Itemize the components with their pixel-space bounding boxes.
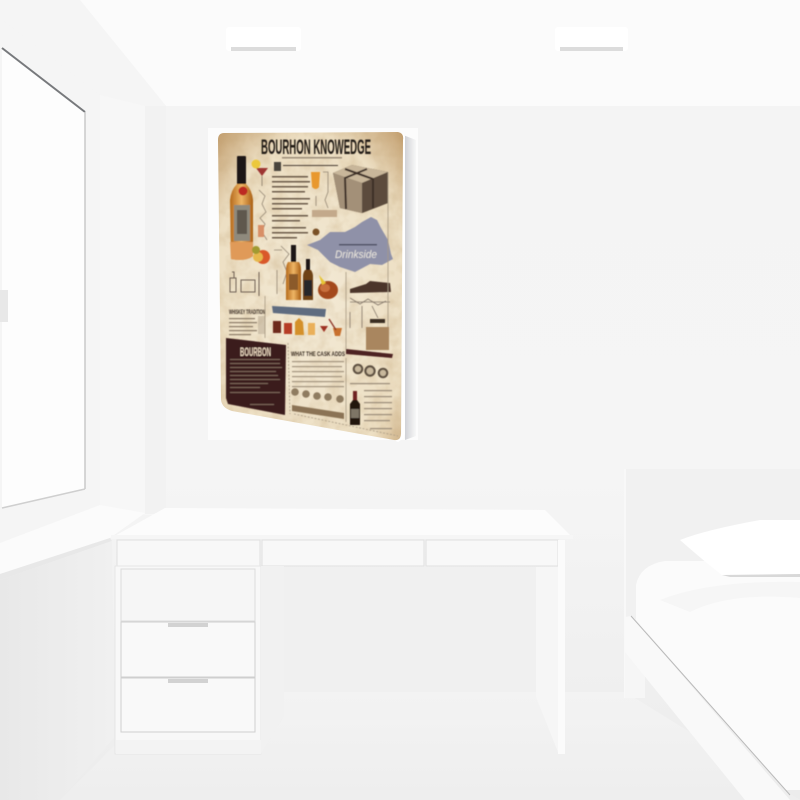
- tan swatch: [366, 327, 389, 350]
- mattress and bedding: [636, 561, 800, 790]
- map of region: [307, 217, 393, 272]
- desk right leg: [536, 540, 565, 754]
- headboard: [625, 469, 800, 629]
- drawer unit: [115, 566, 261, 754]
- brown dot: [312, 228, 320, 236]
- plinth: [116, 740, 261, 754]
- large whiskey bottle: [230, 156, 253, 260]
- amber tall drink: [311, 172, 320, 189]
- ceiling: [80, 0, 800, 106]
- lower left wall: [0, 541, 114, 800]
- second sketch drink column: [316, 172, 328, 208]
- subtitle line: [282, 157, 342, 158]
- ceiling light left: [226, 27, 301, 51]
- small spirits sketch left: [230, 272, 259, 296]
- drawer handles: [168, 625, 208, 681]
- castle-like crate illustration: [333, 165, 388, 213]
- qr code square: [274, 162, 281, 171]
- bed: [624, 469, 800, 800]
- right sketches: [350, 298, 390, 328]
- patterned strip: [292, 405, 344, 419]
- desk under back wall: [284, 567, 536, 692]
- drawer middle: [121, 622, 255, 677]
- pillow shadow: [722, 574, 800, 577]
- ceiling bulkhead: [0, 0, 166, 106]
- headboard edge: [624, 469, 626, 698]
- desk front edge: [111, 535, 573, 539]
- small heading right: [370, 319, 385, 323]
- pillow: [680, 520, 800, 575]
- red label band: [346, 349, 393, 358]
- small copper glass: [258, 225, 264, 237]
- window sill: [0, 505, 145, 574]
- poster paper: [215, 130, 407, 444]
- desk: [111, 508, 573, 754]
- underlined heading: [283, 165, 338, 166]
- drawer bottom: [121, 678, 255, 732]
- desk apron drawers: [117, 540, 558, 566]
- artwork group: [226, 136, 398, 436]
- bourbon dark panel: [226, 338, 286, 415]
- rail top line: [631, 616, 790, 795]
- dark wine bottle: [350, 391, 360, 425]
- drawer unit side: [261, 566, 284, 754]
- cocktail in copper mug: [318, 275, 338, 299]
- artwork group: BOURHON KNOWEDGE: [261, 136, 371, 159]
- central text block: [272, 176, 310, 238]
- two bottles centre: [286, 245, 313, 300]
- row of tasting circles: [291, 388, 344, 403]
- floor: [60, 692, 800, 800]
- poster: bourbon knowledge: [215, 130, 407, 444]
- tasting section heading: WHAT THE CASK ADDS: [291, 352, 345, 358]
- window wall with reveal: [0, 18, 166, 545]
- panel heading: BOURBON: [240, 347, 271, 359]
- ceiling light right: [555, 27, 628, 51]
- cocktail glass: [252, 160, 268, 186]
- lower left text lines: [229, 316, 265, 335]
- window glass: [0, 48, 85, 508]
- bed frame rail: [625, 616, 790, 800]
- right text lines: [350, 383, 392, 429]
- map of region: Drinkside: [335, 249, 377, 261]
- three medallions: [354, 365, 387, 377]
- wood illustration: [350, 281, 391, 293]
- tasting sketch lines: [292, 361, 344, 387]
- panel text lines: [230, 359, 282, 405]
- poster shadow and thickness: [394, 133, 416, 442]
- bedding fold shadow: [660, 582, 800, 612]
- apples: [252, 246, 270, 264]
- row of drinks: [273, 318, 342, 336]
- lower left text block heading: WHISKEY TRADITION: [229, 310, 265, 316]
- bed leg: [625, 625, 645, 698]
- sill front edge: [0, 538, 112, 580]
- blue banner: [272, 306, 326, 317]
- desk top: [111, 508, 573, 538]
- small text tag: [312, 210, 337, 217]
- lighter panel behind poster: [208, 128, 418, 440]
- section divider lines: [265, 172, 398, 436]
- drawer top: [121, 569, 255, 621]
- paper grain: [215, 130, 407, 444]
- sketch glass column: [259, 190, 289, 294]
